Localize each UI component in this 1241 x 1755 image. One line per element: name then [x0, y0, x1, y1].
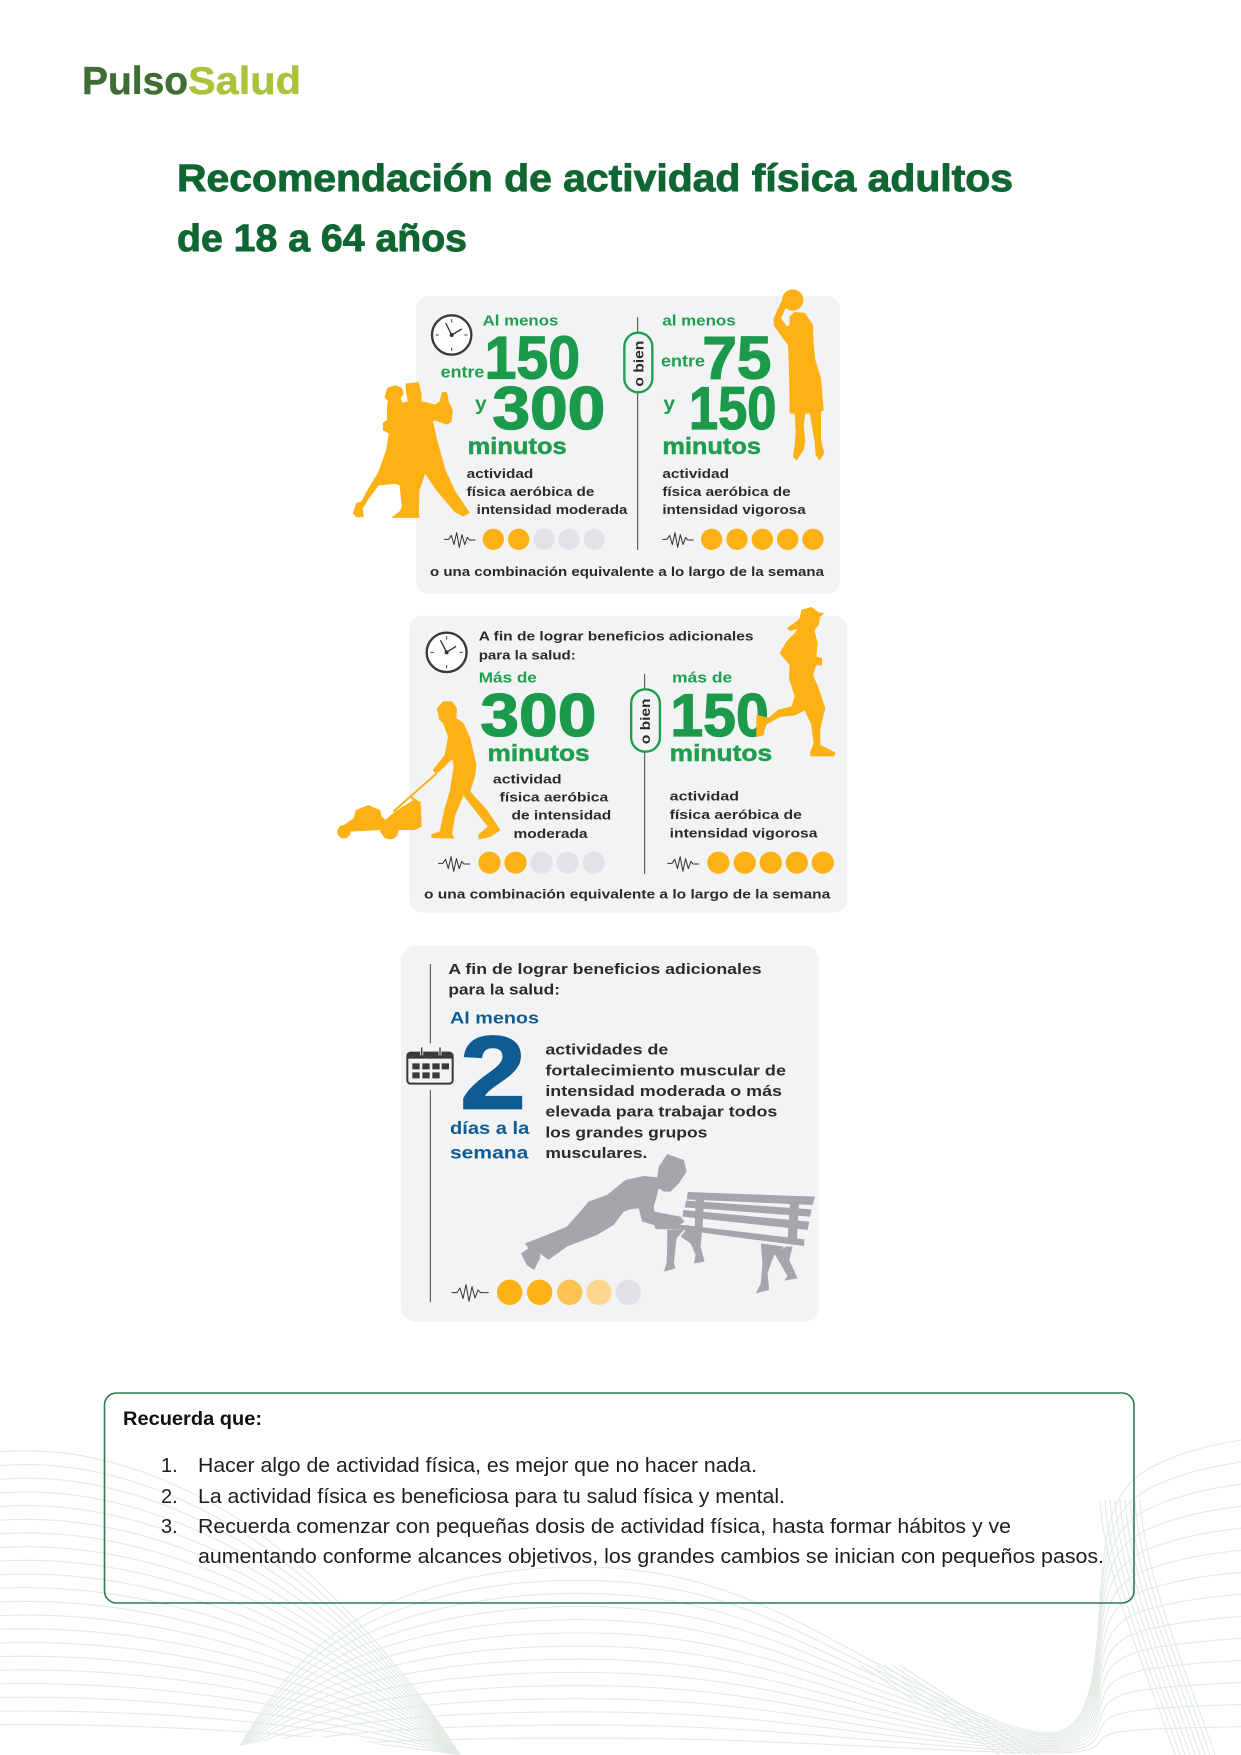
right column: vigorous minutes [661, 314, 806, 517]
left column: moderate minutes: 300 [492, 374, 605, 442]
icon: basketball player [774, 289, 824, 460]
two days per week: 2 [460, 1015, 526, 1131]
intensity scale [452, 1280, 641, 1305]
callout heading: Recuerda que: [123, 1409, 262, 1430]
left column: moderate minutes: y [475, 394, 487, 415]
description: los grandes grupos [545, 1125, 707, 1141]
heading: para la salud: [448, 982, 560, 998]
intensity: moderate [438, 852, 605, 874]
right column: vigorous minutes: minutos [670, 740, 772, 766]
two days per week: días a la [450, 1118, 530, 1138]
left column: moderate minutes: moderada [514, 826, 588, 841]
right column: vigorous minutes: más de [672, 670, 732, 686]
heading [448, 962, 762, 998]
icon: dancers [353, 383, 469, 517]
intensity: vigorous [662, 529, 824, 550]
icon: runner [757, 607, 835, 756]
intensity: vigorous [667, 852, 834, 874]
title: de 18 a 64 años [177, 218, 467, 260]
heading: A fin de lograr beneficios adicionales [479, 629, 754, 644]
left column: moderate minutes: Al menos [483, 314, 558, 330]
combination note: o una combinación equivalente a lo largo de la semana [424, 886, 831, 901]
callout: recuerda que [104, 1393, 1134, 1603]
divider with o bien pill: o bien [630, 341, 646, 387]
description: musculares. [545, 1146, 647, 1162]
list item 3: 3. [161, 1516, 178, 1538]
list item 2: La actividad física es beneficiosa para tu salud física y mental. [198, 1486, 785, 1508]
left column: moderate minutes: 150 [485, 323, 580, 391]
left column: moderate minutes: física aeróbica [500, 789, 609, 804]
two days per week: Al menos [450, 1008, 539, 1027]
right column: vigorous minutes: 75 [702, 323, 771, 391]
heading: A fin de lograr beneficios adicionales [448, 962, 762, 978]
right column: vigorous minutes: física aeróbica de [670, 807, 802, 822]
right column: vigorous minutes: 150 [689, 374, 776, 442]
left column: moderate minutes: física aeróbica de [467, 484, 594, 499]
icon: person doing push-ups on bench [521, 1154, 815, 1293]
right column: vigorous minutes: entre [661, 352, 705, 371]
heading: para la salud: [479, 647, 576, 662]
left column: moderate minutes: de intensidad [512, 808, 611, 823]
list item 3: Recuerda comenzar con pequeñas dosis de actividad física, hasta formar hábitos y ve [198, 1516, 1011, 1538]
left column: moderate minutes: intensidad moderada [477, 502, 628, 517]
description: intensidad moderada o más [545, 1084, 782, 1100]
panel: muscle strengthening [401, 946, 819, 1322]
right column: vigorous minutes [670, 670, 818, 840]
description: fortalecimiento muscular de [545, 1063, 786, 1079]
right column: vigorous minutes: minutos [662, 433, 761, 459]
left column: moderate minutes [479, 670, 611, 841]
icon: calendar [407, 1047, 453, 1084]
two days per week [450, 1008, 539, 1162]
right column: vigorous minutes: y [663, 394, 675, 415]
left column: moderate minutes: entre [441, 362, 484, 381]
left column: moderate minutes: minutos [468, 433, 567, 459]
list item 1: Hacer algo de actividad física, es mejor que no hacer nada. [198, 1455, 757, 1477]
left column: moderate minutes: actividad [467, 466, 533, 481]
description: actividades de [545, 1043, 668, 1059]
logo [82, 60, 301, 103]
description: elevada para trabajar todos [545, 1105, 777, 1121]
two days per week: semana [450, 1142, 529, 1162]
list item 2: 2. [161, 1486, 178, 1508]
list item 3: aumentando conforme alcances objetivos, los grandes cambios se inician con pequeños pasos. [198, 1546, 1104, 1568]
left column: moderate minutes [441, 314, 628, 517]
title [177, 158, 1013, 260]
heading [479, 629, 754, 662]
divider with o bien pill [624, 317, 652, 550]
right column: vigorous minutes: intensidad vigorosa [662, 502, 806, 517]
combination note: o una combinación equivalente a lo largo de la semana [430, 564, 825, 579]
left column: moderate minutes: minutos [488, 740, 590, 766]
right column: vigorous minutes: actividad [662, 466, 729, 481]
right column: vigorous minutes: 150 [670, 681, 769, 749]
list item 3 [161, 1516, 1104, 1568]
panel: additional benefits minutes [409, 616, 847, 913]
logo: Pulso [82, 60, 188, 103]
background wave lines [0, 1440, 1241, 1755]
right column: vigorous minutes: actividad [670, 789, 739, 804]
left column: moderate minutes: 300 [480, 681, 596, 749]
intensity: moderate [444, 529, 605, 550]
left column: moderate minutes: actividad [493, 771, 562, 786]
divider with o bien pill [631, 674, 660, 874]
list item 1: 1. [161, 1455, 178, 1477]
left column: moderate minutes: Más de [479, 670, 537, 686]
right column: vigorous minutes: intensidad vigorosa [670, 825, 818, 840]
icon: clock [432, 315, 471, 355]
right column: vigorous minutes: al menos [662, 314, 736, 330]
icon: clock [427, 633, 467, 672]
title: Recomendación de actividad física adultos [177, 158, 1013, 200]
panel: first recommendation [416, 296, 840, 594]
icon: man with lawn mower [337, 702, 500, 839]
divider with o bien pill: o bien [637, 698, 653, 744]
right column: vigorous minutes: física aeróbica de [662, 484, 791, 499]
logo: Salud [188, 60, 301, 103]
description [545, 1043, 786, 1162]
